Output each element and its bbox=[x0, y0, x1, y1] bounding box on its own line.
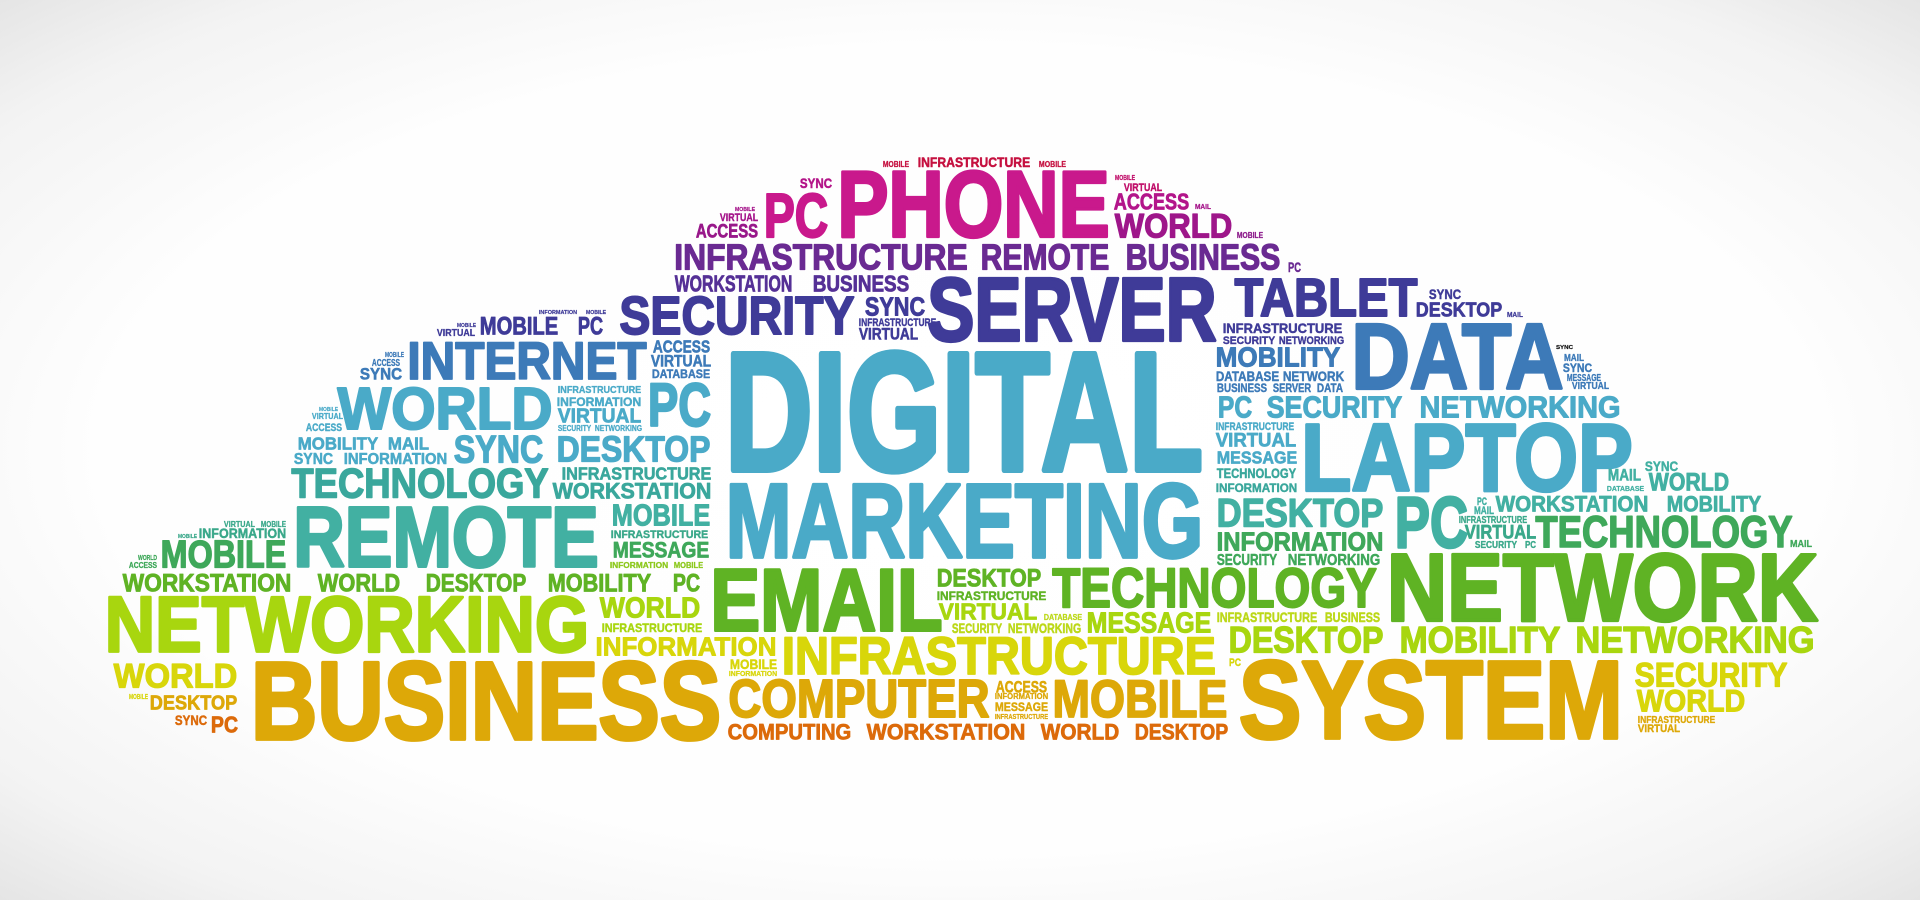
word: DATA: DATA bbox=[1351, 306, 1564, 409]
band: lime row: NETWORKING bbox=[1575, 619, 1815, 661]
band: teal row: MOBILE bbox=[612, 498, 710, 532]
band: red crown: MOBILE bbox=[1115, 174, 1135, 182]
band: light blue centre: INFORMATION bbox=[344, 451, 447, 468]
band: purple row: PC bbox=[1288, 260, 1301, 276]
band: mid green row: MOBILE bbox=[261, 519, 286, 529]
word: EMAIL: EMAIL bbox=[710, 552, 943, 650]
band: mid green row: SECURITY bbox=[1217, 552, 1278, 569]
band: green row bbox=[123, 534, 1818, 650]
band: purple row: BUSINESS bbox=[1126, 237, 1280, 277]
band: mid green row: MAIL bbox=[1790, 539, 1812, 550]
band: light blue centre: VIRTUAL bbox=[558, 404, 641, 428]
band: teal row: MAIL bbox=[1474, 505, 1494, 517]
band: mid green row: WORLD bbox=[138, 554, 157, 562]
band: gold row bbox=[150, 639, 1715, 763]
band: indigo row: PC bbox=[578, 313, 603, 340]
word: MOBILE centre: MOBILE bbox=[1053, 670, 1227, 729]
band: green row: DESKTOP bbox=[426, 570, 526, 597]
band: magenta row bbox=[696, 152, 1263, 257]
word: TECHNOLOGY centre: TECHNOLOGY bbox=[1052, 558, 1377, 620]
word: LAPTOP: LAPTOP bbox=[1301, 404, 1633, 511]
band: magenta row: MAIL bbox=[1195, 203, 1212, 211]
band: blue row: ACCESS bbox=[653, 336, 710, 357]
band: gold row: VIRTUAL bbox=[1638, 723, 1680, 735]
band: teal row: MOBILITY bbox=[1667, 491, 1761, 516]
band: lime row: DESKTOP bbox=[1229, 619, 1383, 661]
band: mid green row: NETWORKING bbox=[1288, 552, 1380, 569]
band: green row: MOBILITY bbox=[548, 570, 651, 597]
band: green row: WORKSTATION bbox=[123, 570, 291, 597]
band: orange base row: DESKTOP bbox=[1135, 719, 1228, 744]
band: indigo row: NETWORKING bbox=[1279, 335, 1344, 347]
band: lime row: INFRASTRUCTURE bbox=[602, 620, 702, 635]
band: light blue centre bbox=[294, 317, 1633, 580]
band: yellow row: MOBILE bbox=[730, 657, 777, 673]
band: blue row: DATABASE bbox=[1216, 369, 1279, 385]
band: indigo row: SYNC bbox=[865, 292, 925, 321]
band: green row: INFRASTRUCTURE bbox=[937, 588, 1046, 603]
band: teal row: DESKTOP bbox=[1217, 490, 1383, 535]
band: light blue centre: MOBILITY bbox=[298, 433, 379, 454]
band: mid green row: VIRTUAL bbox=[224, 519, 255, 529]
band: yellow row: SECURITY bbox=[1635, 655, 1788, 694]
band: purple row: INFRASTRUCTURE bbox=[674, 237, 968, 277]
word: PC: PC bbox=[648, 372, 711, 440]
word: PC: PC bbox=[1395, 483, 1468, 563]
band: light blue centre: NETWORKING bbox=[1420, 390, 1621, 424]
band: light blue centre: ACCESS bbox=[306, 422, 342, 434]
band: indigo row: MAIL bbox=[1507, 311, 1524, 319]
band: orange base row: WORKSTATION bbox=[867, 719, 1025, 744]
band: red crown: VIRTUAL bbox=[1124, 182, 1162, 194]
band: indigo row: SYNC bbox=[1429, 287, 1461, 303]
band: teal row: WORKSTATION bbox=[1496, 491, 1648, 516]
headline: MARKETING: MARKETING bbox=[726, 462, 1203, 580]
band: blue row: SYNC bbox=[360, 365, 402, 384]
band: light blue centre: INFRASTRUCTURE bbox=[558, 385, 642, 396]
word: REMOTE: REMOTE bbox=[293, 489, 599, 585]
band: lime row: DATABASE bbox=[1044, 612, 1082, 622]
band: blue row: MOBILITY bbox=[1216, 342, 1340, 373]
band: teal row: VIRTUAL bbox=[1465, 522, 1536, 544]
band: gold row: INFRASTRUCTURE bbox=[995, 713, 1048, 721]
band: blue row: DATABASE bbox=[652, 366, 710, 381]
band: light blue centre: NETWORKING bbox=[595, 423, 642, 433]
band: orange base row: PC bbox=[211, 712, 238, 738]
band: magenta row: MOBILE bbox=[1237, 230, 1263, 240]
band: teal row bbox=[291, 459, 1761, 585]
band: orange base row: WORLD bbox=[1041, 719, 1119, 744]
band: light blue centre: VIRTUAL bbox=[1216, 430, 1296, 452]
band: indigo row: VIRTUAL bbox=[437, 328, 475, 339]
band: blue row: MAIL bbox=[1564, 353, 1584, 364]
band: teal row: SECURITY bbox=[1475, 540, 1517, 551]
band: yellow row: INFORMATION bbox=[596, 632, 776, 661]
band: gold row: INFORMATION bbox=[995, 691, 1048, 701]
band: light blue centre: MOBILE bbox=[319, 407, 338, 413]
band: orange base row: COMPUTING bbox=[728, 719, 851, 744]
band: blue row: SYNC bbox=[1556, 345, 1573, 351]
band: purple row: REMOTE bbox=[981, 237, 1109, 277]
band: yellow row: INFORMATION bbox=[729, 670, 777, 678]
band: lime row: MESSAGE bbox=[1087, 607, 1211, 639]
band: blue row: BUSINESS bbox=[1217, 380, 1267, 395]
band: yellow row: WORLD bbox=[114, 656, 237, 695]
band: light blue centre: SECURITY bbox=[558, 423, 591, 433]
band: lime row: SECURITY bbox=[952, 621, 1003, 637]
band: yellow row: WORLD bbox=[1637, 682, 1745, 718]
band: blue row: SERVER bbox=[1273, 380, 1311, 395]
word: COMPUTER: COMPUTER bbox=[728, 668, 990, 729]
band: light blue centre: VIRTUAL bbox=[312, 411, 343, 421]
band: indigo row: INFORMATION bbox=[539, 310, 577, 316]
headline: DIGITAL: DIGITAL bbox=[725, 317, 1203, 506]
band: lime row: INFRASTRUCTURE bbox=[1217, 610, 1317, 626]
word: INFRASTRUCTURE centre: INFRASTRUCTURE bbox=[782, 627, 1216, 686]
band: blue row: DATA bbox=[1317, 380, 1343, 395]
band: light blue centre: PC bbox=[1218, 390, 1252, 424]
band: lime row bbox=[105, 582, 1815, 669]
band: light blue centre: MESSAGE bbox=[1217, 447, 1297, 468]
band: teal row: INFRASTRUCTURE bbox=[611, 529, 709, 541]
band: yellow row: MOBILE bbox=[129, 693, 148, 701]
word: WORLD: WORLD bbox=[337, 375, 553, 442]
word cloud bbox=[105, 152, 1818, 763]
band: gold row: DESKTOP bbox=[150, 691, 237, 715]
band: red crown: INFRASTRUCTURE bbox=[918, 155, 1030, 171]
band: mid green row: INFORMATION bbox=[199, 526, 286, 542]
band: light blue centre: SYNC bbox=[294, 451, 333, 468]
word: PHONE: PHONE bbox=[837, 152, 1110, 257]
word: TECHNOLOGY right: TECHNOLOGY bbox=[1535, 507, 1793, 557]
band: gold row: ACCESS bbox=[996, 678, 1047, 697]
word: NETWORKING left: NETWORKING bbox=[105, 582, 589, 669]
band: purple row: BUSINESS bbox=[813, 271, 909, 297]
band: indigo row: DESKTOP bbox=[1416, 298, 1502, 322]
band: mid green row: MESSAGE bbox=[613, 537, 709, 562]
band: indigo row: MOBILE bbox=[586, 310, 606, 316]
band: light blue centre: MAIL bbox=[388, 433, 429, 454]
band: teal row: MAIL bbox=[1608, 466, 1641, 485]
band: gold row: MESSAGE bbox=[995, 699, 1048, 714]
word: TECHNOLOGY left: TECHNOLOGY bbox=[291, 460, 549, 507]
band: light blue centre: INFORMATION bbox=[557, 394, 641, 409]
band: indigo row: MOBILE bbox=[457, 323, 476, 329]
band: orange base row: SYNC bbox=[175, 713, 207, 729]
band: teal row: SYNC bbox=[1645, 459, 1678, 475]
band: green row: PC bbox=[673, 570, 700, 597]
band: teal row: INFRASTRUCTURE bbox=[1459, 515, 1527, 526]
band: light blue centre: DESKTOP bbox=[557, 429, 710, 469]
band: light blue centre: INFRASTRUCTURE bbox=[1216, 421, 1295, 433]
band: teal row: PC bbox=[1525, 540, 1536, 551]
band: yellow row: PC bbox=[1229, 657, 1241, 669]
band: purple row bbox=[674, 237, 1301, 297]
band: blue row bbox=[360, 306, 1609, 409]
band: teal row: WORLD bbox=[1649, 469, 1729, 496]
band: magenta row: WORLD bbox=[1115, 206, 1232, 245]
band: blue row: MESSAGE bbox=[1567, 373, 1601, 384]
band: magenta row: ACCESS bbox=[1114, 189, 1189, 215]
band: blue row: SYNC bbox=[1563, 360, 1592, 375]
band: teal row: DATABASE bbox=[1607, 485, 1644, 493]
band: lime row: WORLD bbox=[600, 592, 700, 624]
band: red crown: MOBILE bbox=[1039, 159, 1066, 169]
band: mid green row: MOBILE bbox=[178, 534, 197, 540]
band: lime row: VIRTUAL bbox=[939, 599, 1037, 625]
word: PC: PC bbox=[764, 181, 828, 251]
band: blue row: NETWORK bbox=[1283, 369, 1345, 385]
band: blue row: VIRTUAL bbox=[651, 352, 711, 371]
band: indigo row: INFRASTRUCTURE bbox=[1223, 321, 1342, 337]
band: red crown bbox=[883, 155, 1162, 194]
band: lime row: BUSINESS bbox=[1325, 610, 1380, 626]
band: green row: MOBILE bbox=[674, 560, 703, 570]
band: light blue centre: SECURITY bbox=[1267, 390, 1402, 424]
band: teal row: INFORMATION bbox=[1216, 480, 1297, 495]
word: INTERNET: INTERNET bbox=[407, 332, 647, 391]
word: NETWORK: NETWORK bbox=[1387, 534, 1818, 641]
band: teal row: INFRASTRUCTURE bbox=[562, 463, 711, 484]
band: indigo row: SECURITY bbox=[1223, 335, 1276, 347]
word: BUSINESS: BUSINESS bbox=[251, 640, 721, 763]
band: indigo row: INFRASTRUCTURE bbox=[859, 317, 937, 329]
band: magenta row: MOBILE bbox=[735, 207, 755, 213]
band: orange base row bbox=[175, 712, 1228, 744]
word: TABLET: TABLET bbox=[1235, 267, 1418, 328]
band: mid green row: ACCESS bbox=[129, 560, 157, 570]
band: indigo row: VIRTUAL bbox=[859, 325, 918, 344]
band: magenta row: ACCESS bbox=[696, 221, 758, 243]
word: SYSTEM: SYSTEM bbox=[1239, 639, 1623, 762]
band: green row: WORLD bbox=[318, 570, 400, 597]
band: blue row: VIRTUAL bbox=[1572, 381, 1609, 392]
word: MOBILE left: MOBILE bbox=[161, 533, 286, 576]
band: green row: DESKTOP bbox=[937, 565, 1041, 592]
band: magenta row: VIRTUAL bbox=[720, 212, 758, 224]
band: green row: INFORMATION bbox=[610, 560, 668, 570]
band: red crown: MOBILE bbox=[883, 159, 909, 169]
band: blue row: ACCESS bbox=[372, 358, 400, 369]
band: teal row: PC bbox=[1477, 496, 1487, 508]
word: SECURITY: SECURITY bbox=[619, 285, 855, 346]
band: indigo row: MOBILE bbox=[480, 313, 558, 340]
band: blue row: MOBILE bbox=[385, 351, 404, 359]
word: SERVER: SERVER bbox=[927, 259, 1217, 360]
band: lime row: NETWORKING bbox=[1008, 621, 1081, 637]
band: indigo row bbox=[437, 259, 1524, 360]
band: purple row: WORKSTATION bbox=[675, 271, 792, 297]
band: teal row: TECHNOLOGY bbox=[1217, 466, 1297, 482]
band: teal row: WORKSTATION bbox=[553, 478, 711, 503]
band: yellow row bbox=[114, 627, 1788, 718]
band: magenta row: SYNC bbox=[800, 176, 832, 192]
band: lime row: MOBILITY bbox=[1400, 619, 1560, 661]
band: gold row: INFRASTRUCTURE bbox=[1638, 715, 1715, 726]
band: mid green row: INFORMATION bbox=[1217, 527, 1383, 556]
band: mid green row bbox=[129, 507, 1812, 576]
band: light blue centre: SYNC bbox=[454, 428, 543, 471]
